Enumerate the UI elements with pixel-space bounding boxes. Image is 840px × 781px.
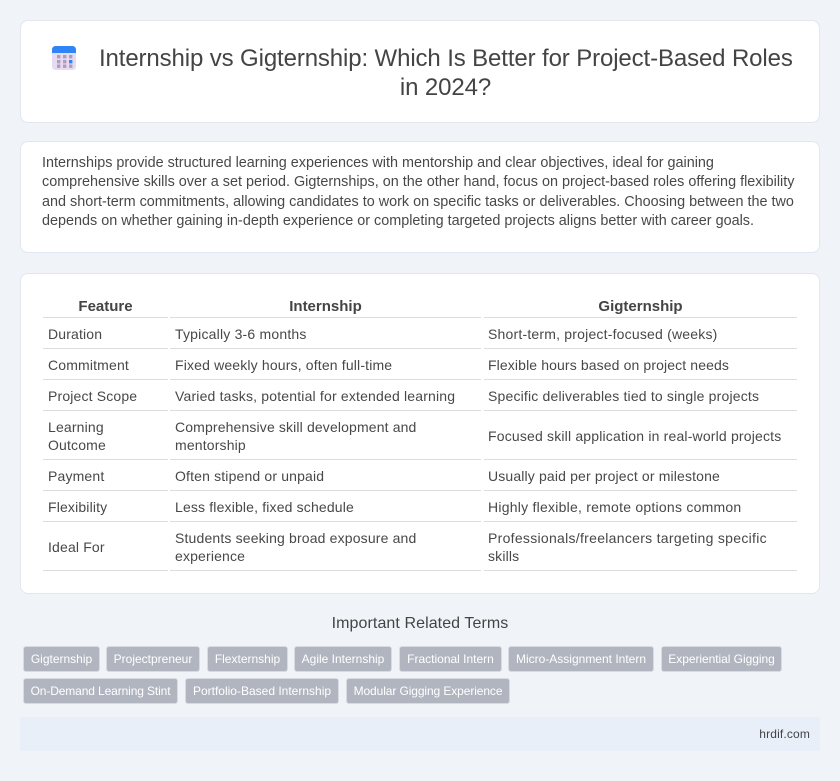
table header: Gigternship	[598, 298, 683, 315]
row: Commitment: Fixed weekly hours, often full-time	[175, 357, 392, 373]
title	[99, 45, 793, 101]
table header: Internship	[289, 298, 362, 315]
intro text: depends on whether gaining in-depth experience or completing targeted projects aligns better with career goals.	[42, 213, 754, 229]
related term tags: Modular Gigging Experience	[354, 684, 502, 698]
related term tags	[23, 646, 782, 704]
row: Project Scope: Varied tasks, potential for extended learning	[175, 388, 455, 404]
title: Internship vs Gigternship: Which Is Better for Project-Based Roles	[99, 45, 793, 72]
row: Ideal For: experience	[175, 548, 245, 564]
row: Learning Outcome	[48, 419, 781, 453]
row: Project Scope	[48, 388, 759, 404]
row: Commitment: Commitment	[48, 357, 129, 373]
row: Learning Outcome: Learning	[48, 419, 104, 435]
row: Ideal For: Professionals/freelancers targeting specific	[488, 530, 767, 546]
row: Learning Outcome: Outcome	[48, 437, 106, 453]
related terms heading: Important Related Terms	[332, 615, 508, 632]
intro text	[42, 155, 794, 229]
intro text: Internships provide structured learning experiences with mentorship and clear objectives, ideal for gaining	[42, 155, 714, 171]
footer bar	[20, 717, 820, 751]
row: Payment: Usually paid per project or milestone	[488, 468, 720, 484]
related term tags: Portfolio-Based Internship	[193, 684, 331, 698]
row: Ideal For: skills	[488, 548, 519, 564]
row: Project Scope: Specific deliverables tied to single projects	[488, 388, 759, 404]
row: Duration: Duration	[48, 326, 102, 342]
row: Ideal For	[48, 530, 767, 564]
row: Ideal For: Students seeking broad exposure and	[175, 530, 416, 546]
related term tags: Projectpreneur	[114, 652, 192, 666]
row: Flexibility	[48, 499, 741, 515]
related term tags: On-Demand Learning Stint	[31, 684, 170, 698]
intro text: and short-term commitments, allowing candidates to work on specific tasks or deliverables. Choosing between the two	[42, 194, 794, 210]
row: Payment	[48, 468, 720, 484]
row: Learning Outcome: Comprehensive skill development and	[175, 419, 416, 435]
related term tags: Fractional Intern	[407, 652, 494, 666]
row: Learning Outcome: Focused skill application in real-world projects	[488, 428, 781, 444]
related term tags: Micro-Assignment Intern	[516, 652, 646, 666]
row: Commitment	[48, 357, 729, 373]
footer source text: hrdif.com	[759, 727, 810, 741]
table header: Feature	[78, 298, 133, 315]
row: Flexibility: Less flexible, fixed schedule	[175, 499, 354, 515]
row: Commitment: Flexible hours based on project needs	[488, 357, 729, 373]
intro text: comprehensive skills over a set period. Gigternships, on the other hand, focus on project-based roles offering flexibility	[42, 174, 794, 190]
row: Flexibility: Highly flexible, remote options common	[488, 499, 741, 515]
row: Duration: Short-term, project-focused (weeks)	[488, 326, 718, 342]
row: Payment: Often stipend or unpaid	[175, 468, 324, 484]
row: Learning Outcome: mentorship	[175, 437, 246, 453]
comparison table panel	[20, 273, 820, 594]
title: in 2024?	[400, 74, 491, 101]
related term tags: Experiential Gigging	[668, 652, 775, 666]
table header	[78, 298, 683, 315]
intro panel	[20, 141, 820, 253]
icon: calendar	[52, 46, 76, 70]
row: Duration: Typically 3-6 months	[175, 326, 307, 342]
row: Duration	[48, 326, 718, 342]
row: Project Scope: Project Scope	[48, 388, 137, 404]
header panel	[20, 20, 820, 123]
related term tags: Agile Internship	[302, 652, 384, 666]
related term tags: Flexternship	[215, 652, 280, 666]
row: Payment: Payment	[48, 468, 104, 484]
row: Ideal For: Ideal For	[48, 539, 105, 555]
related term tags: Gigternship	[31, 652, 92, 666]
row: Flexibility: Flexibility	[48, 499, 107, 515]
